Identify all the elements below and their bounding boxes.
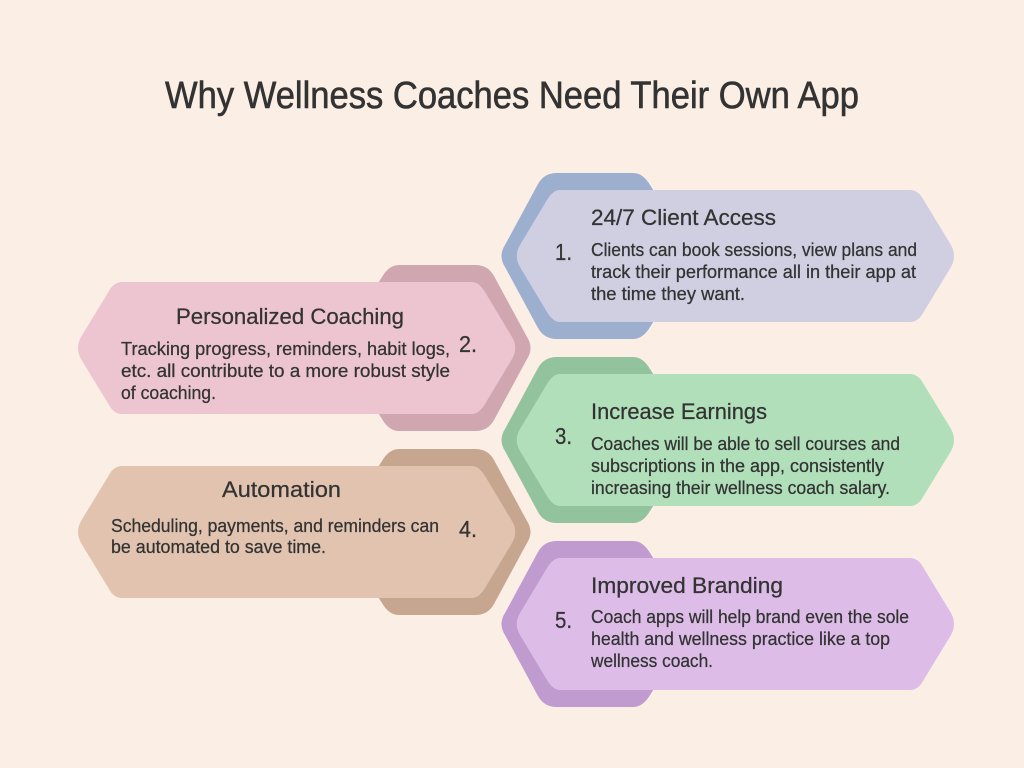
body text: panel 5: Coach apps will help brand even the sole (591, 607, 909, 627)
body text: panel 3: Coaches will be able to sell courses and (591, 434, 900, 454)
front hexagon: panel 3 (517, 374, 954, 506)
number 4: 4. (459, 516, 477, 542)
panel: 4 Automation (78, 449, 530, 615)
body text: panel 4: Scheduling, payments, and reminders can (111, 516, 439, 536)
body text: panel 1: Clients can book sessions, view plans and (591, 240, 917, 260)
body text: panel 3: subscriptions in the app, consistently (591, 456, 884, 476)
panel: 2 Personalized Coaching (78, 265, 530, 431)
front hexagon: panel 5 (517, 558, 954, 690)
heading: Increase Earnings: Increase Earnings (591, 399, 767, 424)
number 5: 5. (555, 607, 572, 633)
body text: panel 5 (590, 607, 909, 671)
panel: 1 24/7 Client Access (502, 173, 954, 339)
heading: Automation: Automation (222, 477, 341, 502)
body text: panel 2: etc. all contribute to a more robust style (121, 361, 450, 381)
body text: panel 4 (111, 516, 439, 557)
back hexagon: panel 4 (337, 449, 530, 615)
body text: panel 2 (121, 339, 450, 403)
body text: panel 3 (591, 434, 900, 498)
back hexagon: panel 3 (502, 357, 695, 523)
body text: panel 5: health and wellness practice like a top (591, 629, 890, 649)
front hexagon: panel 2 (78, 282, 515, 414)
heading: Personalized Coaching: Personalized Coaching (176, 304, 404, 329)
number 2: 2. (459, 331, 477, 357)
body text: panel 5: wellness coach. (590, 651, 713, 671)
back hexagon: panel 5 (502, 541, 695, 707)
body text: panel 1: track their performance all in their app at (591, 262, 916, 282)
body text: panel 1: the time they want. (591, 284, 745, 304)
front hexagon: panel 4 (78, 466, 515, 598)
body text: panel 3: increasing their wellness coach salary. (591, 478, 890, 498)
number 3: 3. (555, 423, 572, 449)
front hexagon: panel 1 (517, 190, 954, 322)
body text: panel 2: Tracking progress, reminders, habit logs, (121, 339, 450, 359)
heading: 24/7 Client Access: 24/7 Client Access (591, 205, 776, 230)
panel: 5 Improved Branding (502, 541, 954, 707)
body text: panel 2: of coaching. (121, 383, 216, 403)
back hexagon: panel 2 (337, 265, 530, 431)
body text: panel 1 (591, 240, 917, 304)
body text: panel 4: be automated to save time. (111, 537, 326, 557)
heading: Improved Branding: Improved Branding (591, 573, 783, 598)
back hexagon: panel 1 (502, 173, 695, 339)
title: Why Wellness Coaches Need Their Own App (165, 75, 859, 117)
panel: 3 Increase Earnings (502, 357, 954, 523)
number 1: 1. (555, 239, 572, 265)
